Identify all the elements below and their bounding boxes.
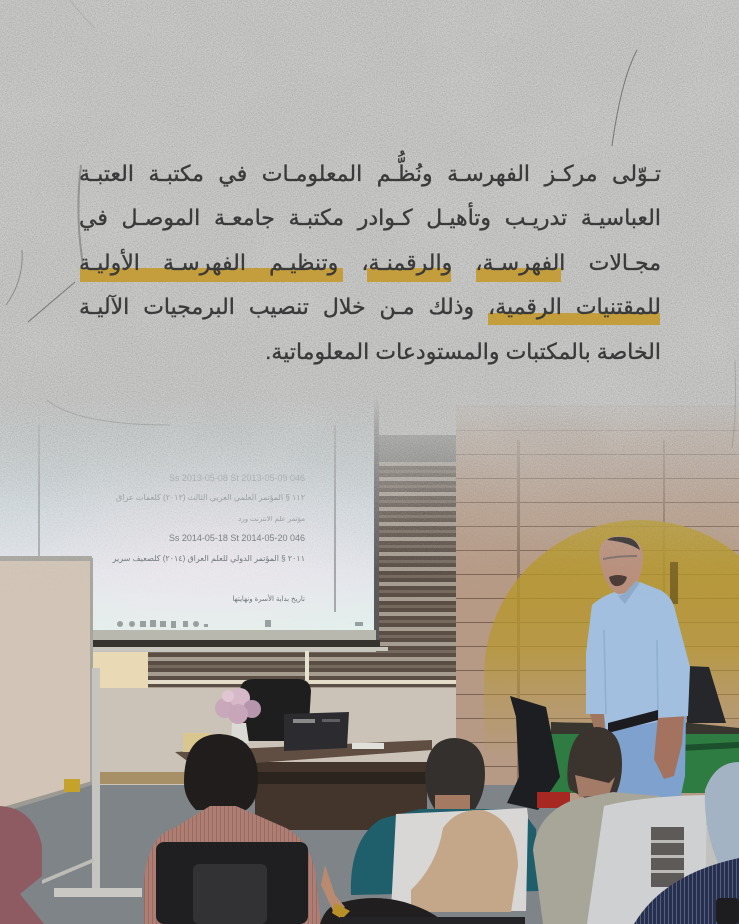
rear striped wall bbox=[148, 435, 458, 688]
window bbox=[92, 652, 148, 692]
person standing bbox=[586, 536, 690, 800]
text line 4: للمقتنيات الرقمية، وذلك مـن خلال تنصيب البرمجيات الآليـة bbox=[79, 294, 661, 319]
projection screen: تاريخ بداية الأسرة ونهايتها bbox=[233, 594, 305, 603]
floor bbox=[0, 785, 560, 924]
projection screen: ٢٠١١ § المؤتمر الدولي للعلم العراق (٢٠١٤) كلصعيف سرير bbox=[112, 554, 305, 563]
monitor on green table bbox=[687, 666, 726, 723]
projection screen: Ss 2013-05-08 St 2013-05-09 046 bbox=[169, 473, 305, 483]
black task chair bbox=[507, 696, 560, 810]
text line 1: تـوّلى مركـز الفهرسـة ونُظُّـم المعلومـات في مكتبـة العتبـة bbox=[79, 161, 661, 186]
audience: woman in black hijab bbox=[144, 734, 321, 924]
highlight: والرقمنة bbox=[367, 268, 451, 282]
fade of photo into paper bbox=[0, 395, 739, 570]
body paragraph with highlights bbox=[79, 150, 661, 365]
wood panel wall bbox=[456, 405, 739, 825]
lower wall bbox=[92, 680, 460, 785]
paper scratches bbox=[6, 0, 736, 448]
audience: woman in beige hijab bbox=[320, 810, 525, 924]
projection screen: Ss 2014-05-18 St 2014-05-20 046 bbox=[169, 533, 305, 543]
text line 3: مجـالات الفهرسـة، والرقمنـة، وتنظيـم الفهرسـة الأوليـة bbox=[79, 250, 661, 275]
paper texture bbox=[0, 0, 739, 600]
wall dark post bbox=[670, 562, 678, 604]
highlight: الفهرسة bbox=[476, 268, 561, 282]
audience: man in grey shirt bbox=[533, 727, 660, 924]
audience: man in teal shirt bbox=[351, 738, 539, 895]
red object bbox=[537, 792, 570, 808]
audience: woman right bbox=[634, 762, 739, 924]
desk bbox=[175, 733, 432, 830]
white chair back bbox=[391, 808, 528, 911]
highlight: الفهرسة الأولية bbox=[80, 268, 343, 282]
projection screen: ١١٢ § المؤتمر العلمي العربي الثالث (٢٠١٣) كلعمات عراق bbox=[116, 493, 305, 502]
white chair right bbox=[587, 795, 707, 924]
green table bbox=[551, 722, 739, 793]
projection screen: مؤتمر علم الانترنت ورد bbox=[238, 516, 305, 523]
flower vase bbox=[215, 688, 261, 743]
audience: woman left bbox=[0, 806, 44, 924]
text line 2: العباسيـة تدريـب وتأهيـل كـوادر مكتبـة جامعـة الموصـل في bbox=[79, 205, 661, 230]
highlight: للمقتنيات الرقمية bbox=[488, 313, 660, 325]
whiteboard bbox=[0, 556, 142, 897]
office chair behind desk bbox=[240, 679, 311, 741]
text line 5: الخاصة بالمكتبات والمستودعات المعلوماتية. bbox=[265, 339, 661, 364]
laptop bbox=[284, 712, 349, 751]
yellow arch bbox=[484, 515, 739, 760]
projection screen bbox=[0, 400, 388, 651]
